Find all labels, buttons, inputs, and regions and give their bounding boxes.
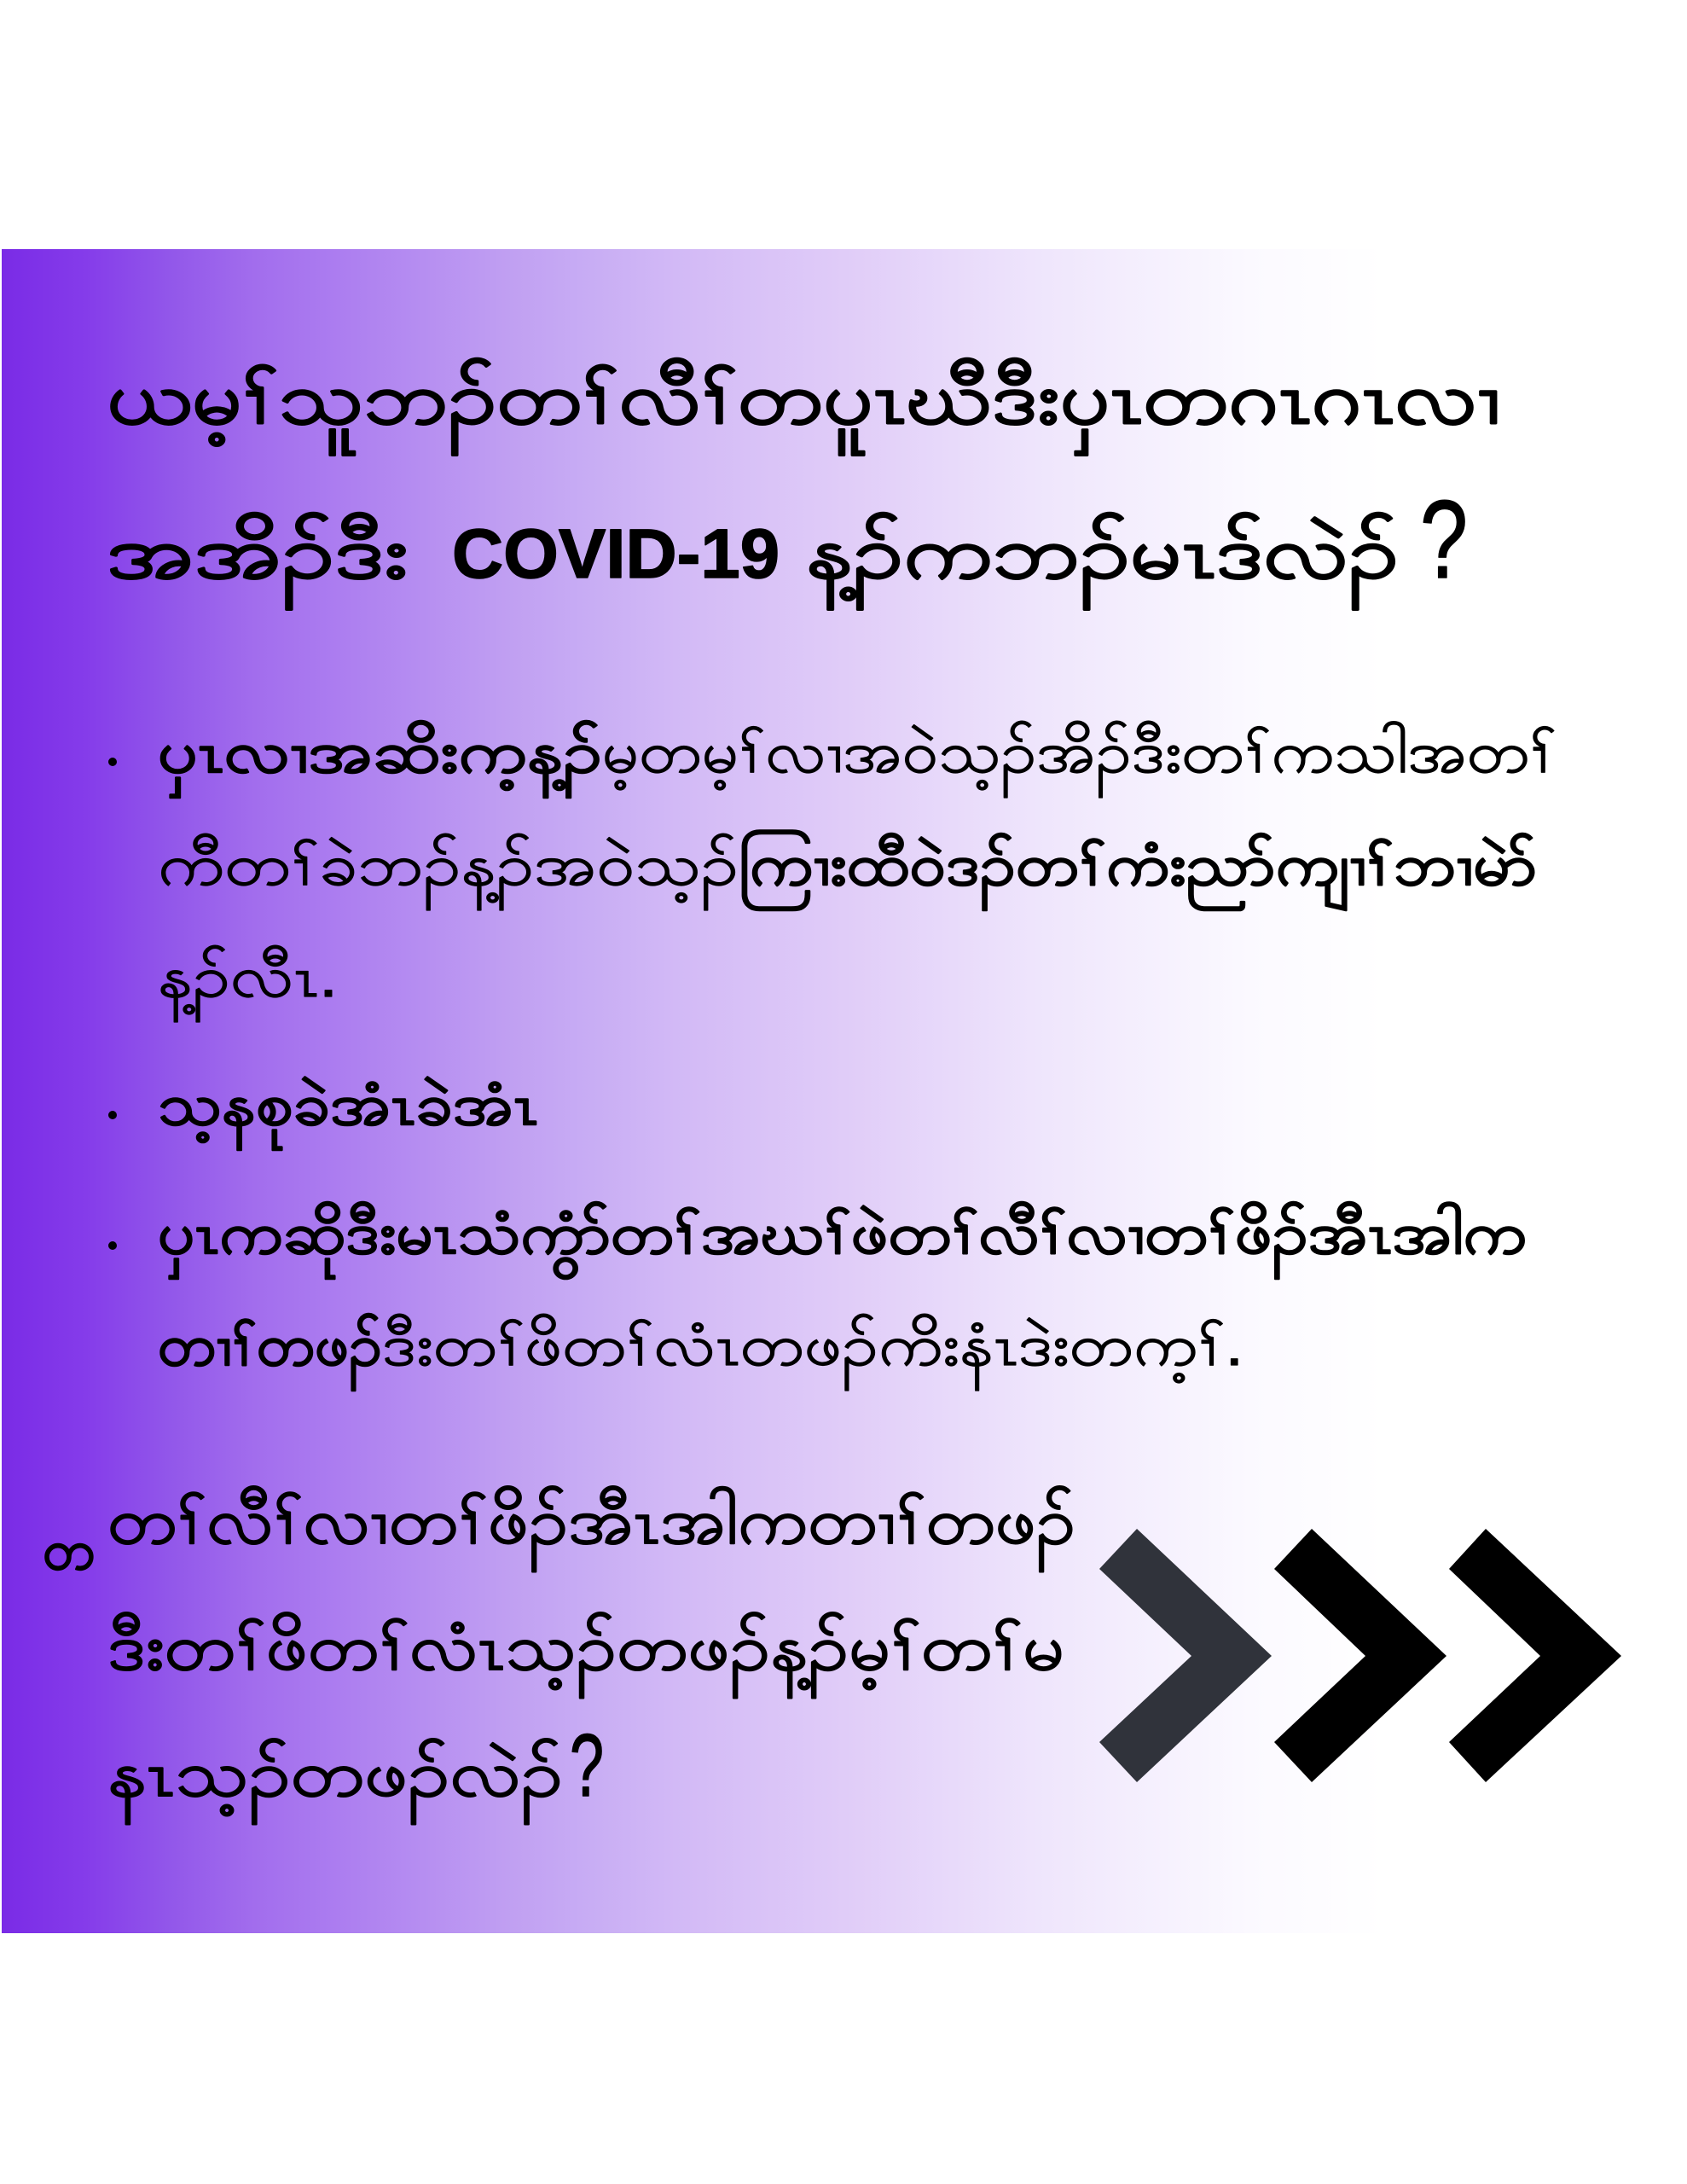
title: အအိၣ်ဒီး <box>107 512 409 610</box>
bullet item: face mask advice <box>108 720 1557 1022</box>
question text: ဒီးတၢ်ဖိတၢ်လံၤသ့ၣ်တဖၣ်န့ၣ်မ့ၢ်တၢ်မ <box>107 1612 1064 1698</box>
bullet item: clean surfaces <box>108 1201 1527 1391</box>
question text <box>43 1485 1075 1824</box>
question text: ? <box>570 1716 604 1815</box>
title: န့ၣ်ကဘၣ်မၤဒ်လဲၣ် <box>806 512 1399 610</box>
question text: တၢ်လီၢ်လၢတၢ်ဖိၣ်အီၤအါကတၢၢ်တဖၣ် <box>107 1485 1075 1571</box>
arrow: black chevron middle <box>1274 1529 1446 1782</box>
bullet item: face mask advice: ပှၤလၢအဆိးက့န့ၣ် <box>158 720 602 798</box>
question text: နၤသ့ၣ်တဖၣ်လဲၣ် <box>107 1738 563 1824</box>
bullet item: clean surfaces: ပှၤကဆိုဒီးမၤသံကွံာ်တၢ်အဃၢ်ဖဲတၢ်လီၢ်လၢတၢ်ဖိၣ်အီၤအါက <box>158 1201 1527 1279</box>
bullet item: face mask advice: န့ၣ်လီၤ. <box>158 944 338 1022</box>
bullet item: clean surfaces: ဒီးတၢ်ဖိတၢ်လံၤတဖၣ်ကိးနံၤဒဲးတက့ၢ်. <box>382 1313 1244 1391</box>
arrow: black chevron right <box>1449 1529 1621 1782</box>
bullet item: wash hands: သ့နစုခဲအံၤခဲအံၤ <box>158 1072 538 1150</box>
bullet item: face mask advice: ကြၢးထီဝဲဒၣ်တၢ်ကံးညာ်ကျၢၢ်ဘၢမဲာ် <box>739 829 1537 911</box>
title <box>107 357 1500 610</box>
arrow: grey chevron <box>1099 1529 1272 1782</box>
bullet item: face mask advice: မ့တမ့ၢ်လၢအဝဲသ့ၣ်အိၣ်ဒီးတၢ်ကသါအတၢ် <box>602 720 1557 798</box>
bullet item: face mask advice: ကီတၢ်ခဲဘၣ်န့ၣ်အဝဲသ့ၣ် <box>158 833 739 910</box>
title: ? <box>1420 477 1468 601</box>
bullet item: wash hands <box>108 1072 538 1150</box>
bullet item: clean surfaces: တၢၢ်တဖၣ် <box>158 1313 382 1391</box>
question text: တ <box>43 1519 95 1581</box>
title: COVID-19 <box>452 515 780 593</box>
title: ယမ့ၢ်သူဘၣ်တၢ်လီၢ်တပူၤဃီဒီးပှၤတဂၤဂၤလၢ <box>107 357 1500 456</box>
icon: three chevron arrows <box>1099 1529 1621 1782</box>
bullet list <box>108 720 1557 1391</box>
panel: purple gradient background <box>2 249 1687 1933</box>
